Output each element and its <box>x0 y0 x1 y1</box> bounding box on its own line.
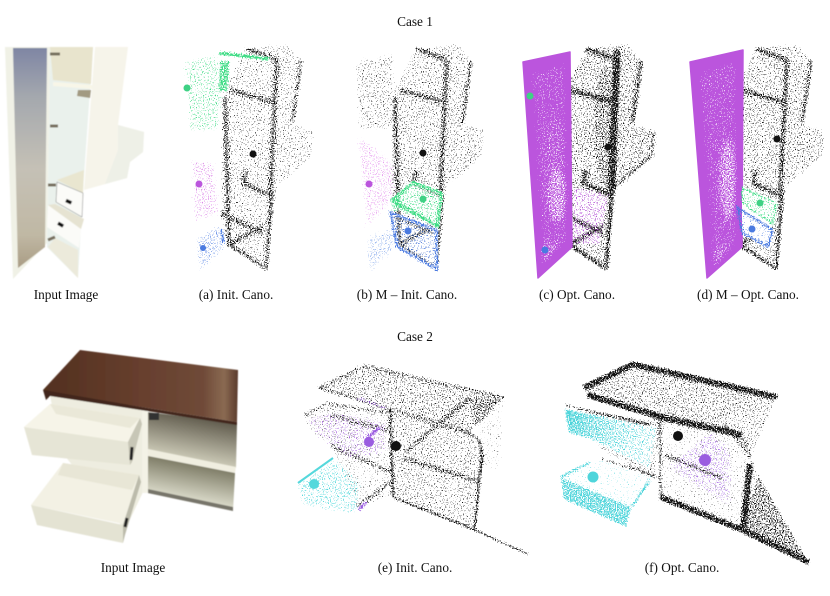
black cabinet points <box>220 43 315 270</box>
point cloud: (c) Opt. Cano. <box>523 43 655 278</box>
drawer backing <box>742 187 777 247</box>
sideboard body <box>50 395 147 530</box>
cupboard shelf <box>148 449 236 473</box>
point cloud: (a) Init. Cano. <box>183 43 315 275</box>
lower cabinet <box>48 238 78 278</box>
magenta door points <box>190 158 220 222</box>
purple door points <box>665 428 733 510</box>
keypoints <box>712 153 718 159</box>
magenta door points <box>356 130 396 232</box>
heading: Case 1: Case 1 <box>397 14 433 29</box>
black cabinet points <box>560 43 655 270</box>
upper drawer <box>24 404 140 442</box>
blue door points <box>366 226 397 276</box>
door with glass <box>5 47 50 279</box>
caption: (c) Opt. Cano.: (c) Opt. Cano. <box>539 287 615 302</box>
magenta door points <box>523 52 572 278</box>
black cabinet points <box>730 43 825 270</box>
wooden top <box>43 350 238 422</box>
blue drawer points <box>390 212 437 270</box>
keypoints <box>184 84 190 92</box>
open cupboard lower <box>143 456 235 511</box>
point cloud: (f) Opt. Cano. <box>560 364 810 563</box>
drawers <box>57 170 84 193</box>
green door points <box>183 53 224 132</box>
hinges <box>48 54 60 240</box>
blue door points <box>195 223 227 275</box>
keypoints <box>699 454 711 466</box>
cyan drawer points <box>296 458 362 516</box>
caption: (d) M – Opt. Cano.: (d) M – Opt. Cano. <box>697 287 799 302</box>
photo: case 1 input cabinet <box>5 47 144 279</box>
green drawer points <box>742 187 777 225</box>
cyan lower drawer points <box>560 458 657 528</box>
photo: case 2 input sideboard <box>24 350 238 543</box>
cabinet interior <box>47 47 93 278</box>
heading: Case 2: Case 2 <box>397 329 433 344</box>
black cabinet points <box>390 43 485 270</box>
cabinet side panel <box>84 47 144 190</box>
caption: Input Image (case 1): Input Image <box>34 287 98 302</box>
point cloud: (d) M – Opt. Cano. <box>690 43 825 278</box>
green drawer points <box>392 182 442 227</box>
black sideboard points <box>565 364 810 563</box>
magenta door points <box>690 50 743 278</box>
caption: (f) Opt. Cano.: (f) Opt. Cano. <box>645 560 719 575</box>
black sideboard points <box>303 365 530 555</box>
caption: (a) Init. Cano.: (a) Init. Cano. <box>199 287 273 302</box>
blue drawer points <box>737 207 773 247</box>
keypoints <box>364 437 374 447</box>
caption: (e) Init. Cano.: (e) Init. Cano. <box>378 560 452 575</box>
caption: Input Image (case 2): Input Image <box>101 560 165 575</box>
cyan upper drawer points <box>564 408 658 470</box>
point cloud: (b) M – Init. Cano. <box>353 43 485 276</box>
open cupboard upper <box>147 412 237 468</box>
point cloud: (e) Init. Cano. <box>296 365 530 555</box>
lock <box>149 413 159 420</box>
caption: (b) M – Init. Cano.: (b) M – Init. Cano. <box>357 287 457 302</box>
magenta drawer points <box>573 187 610 245</box>
keypoints <box>526 92 534 100</box>
lower drawer <box>31 463 139 524</box>
purple drawer points <box>305 410 389 462</box>
keypoints <box>366 180 372 188</box>
